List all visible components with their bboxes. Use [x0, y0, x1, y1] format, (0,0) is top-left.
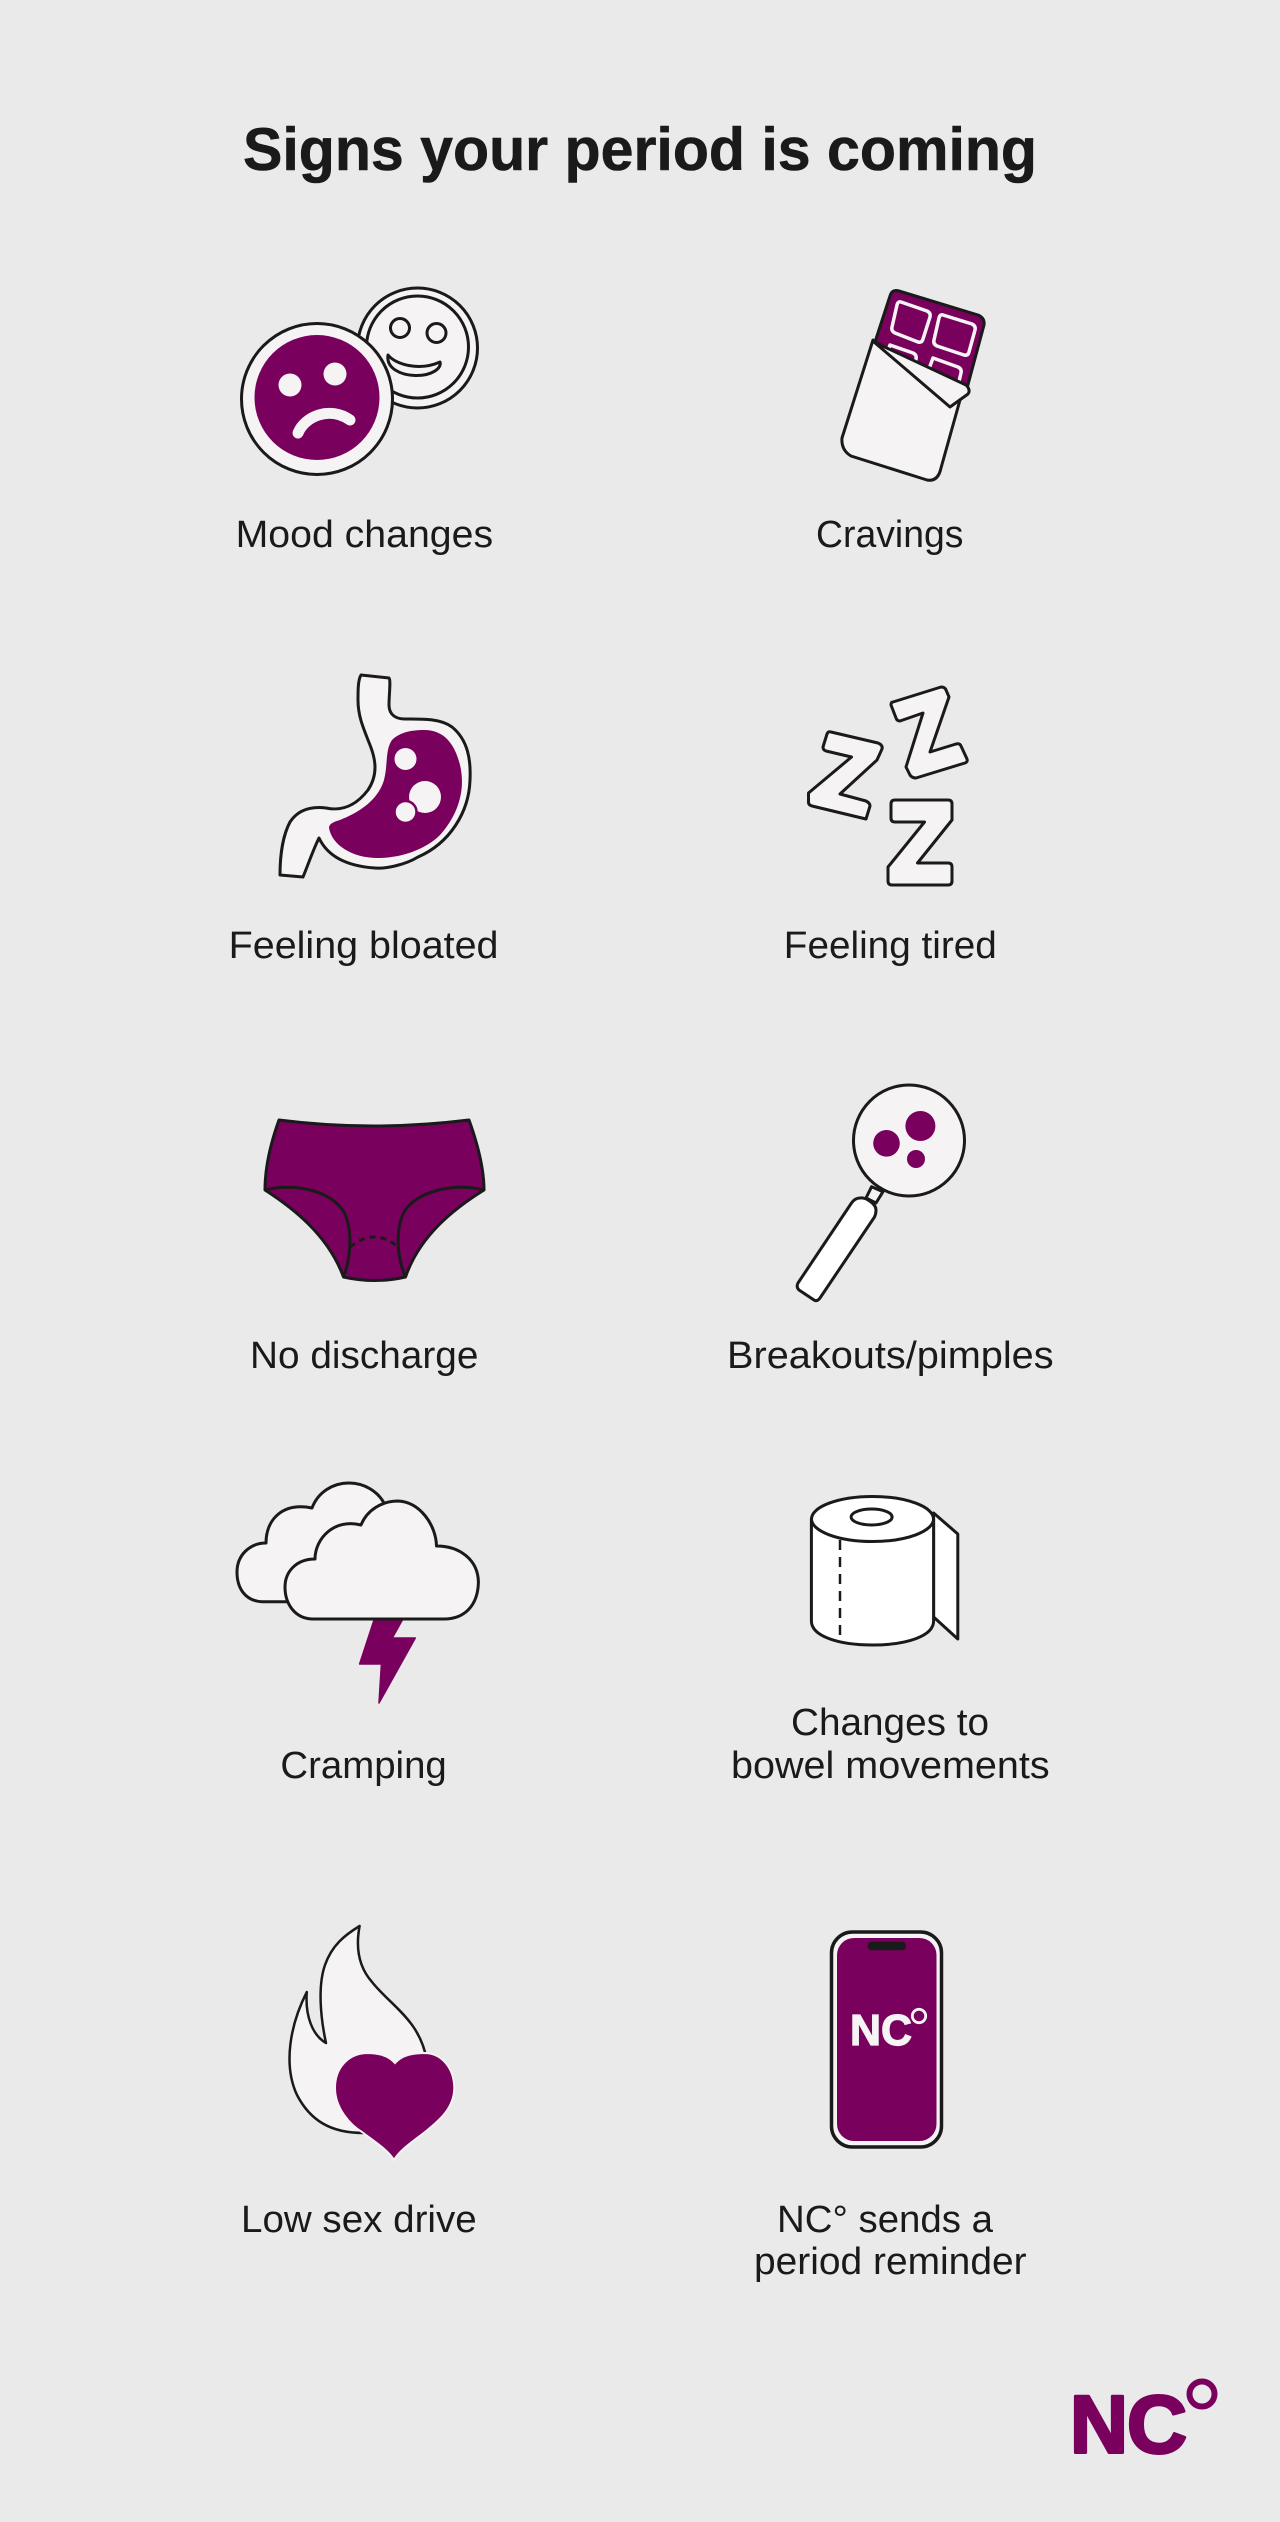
label: low sex drive: Low sex drive — [241, 2199, 477, 2241]
title: Signs your period is coming — [243, 116, 1037, 183]
icon: stomach — [280, 675, 470, 877]
icon: magnifying glass — [797, 1085, 964, 1301]
label: changes to bowel movements: bowel movements — [731, 1745, 1050, 1787]
icon: toilet roll — [811, 1496, 958, 1645]
logo: NC: N — [1070, 2380, 1128, 2470]
logo: NC: C — [1127, 2380, 1187, 2470]
label: mood changes: Mood changes — [236, 514, 493, 556]
logo: NC — [1070, 2380, 1214, 2470]
panel: feeling bloated — [229, 675, 498, 967]
icon: phone with NC logo: NC — [850, 2006, 912, 2055]
label: changes to bowel movements: Changes to — [791, 1702, 989, 1744]
label: no discharge: No discharge — [250, 1335, 478, 1377]
panel: cramping — [237, 1483, 478, 1787]
label: cravings: Cravings — [816, 514, 964, 556]
label: breakouts/pimples: Breakouts/pimples — [727, 1335, 1054, 1377]
label: feeling tired: Feeling tired — [784, 925, 997, 967]
label: cramping: Cramping — [280, 1745, 447, 1787]
panel: low sex drive — [241, 1926, 477, 2241]
panel: no discharge — [250, 1120, 484, 1377]
panel: breakouts/pimples — [727, 1085, 1054, 1377]
label: changes to bowel movements — [731, 1702, 1050, 1787]
panel: mood changes — [236, 288, 493, 556]
panel: changes to bowel movements — [731, 1496, 1050, 1787]
label: NC sends a period reminder: period reminder — [754, 2241, 1027, 2283]
icon: happy and sad faces — [242, 288, 478, 474]
icon: chocolate bar — [842, 291, 984, 480]
icon: storm clouds with lightning — [237, 1483, 478, 1703]
icon: underwear — [265, 1120, 484, 1280]
label: feeling bloated: Feeling bloated — [229, 925, 498, 967]
icon: sleeping Z letters — [808, 687, 967, 885]
label: NC sends a period reminder: NC° sends a — [777, 2199, 994, 2241]
icon: flame and heart — [290, 1926, 454, 2160]
panel: feeling tired — [784, 687, 997, 967]
label: NC sends a period reminder — [754, 2199, 1027, 2283]
panel: NC sends a period reminder — [754, 1932, 1027, 2283]
panel: cravings — [816, 291, 984, 556]
icon: phone with NC logo — [832, 1932, 942, 2147]
